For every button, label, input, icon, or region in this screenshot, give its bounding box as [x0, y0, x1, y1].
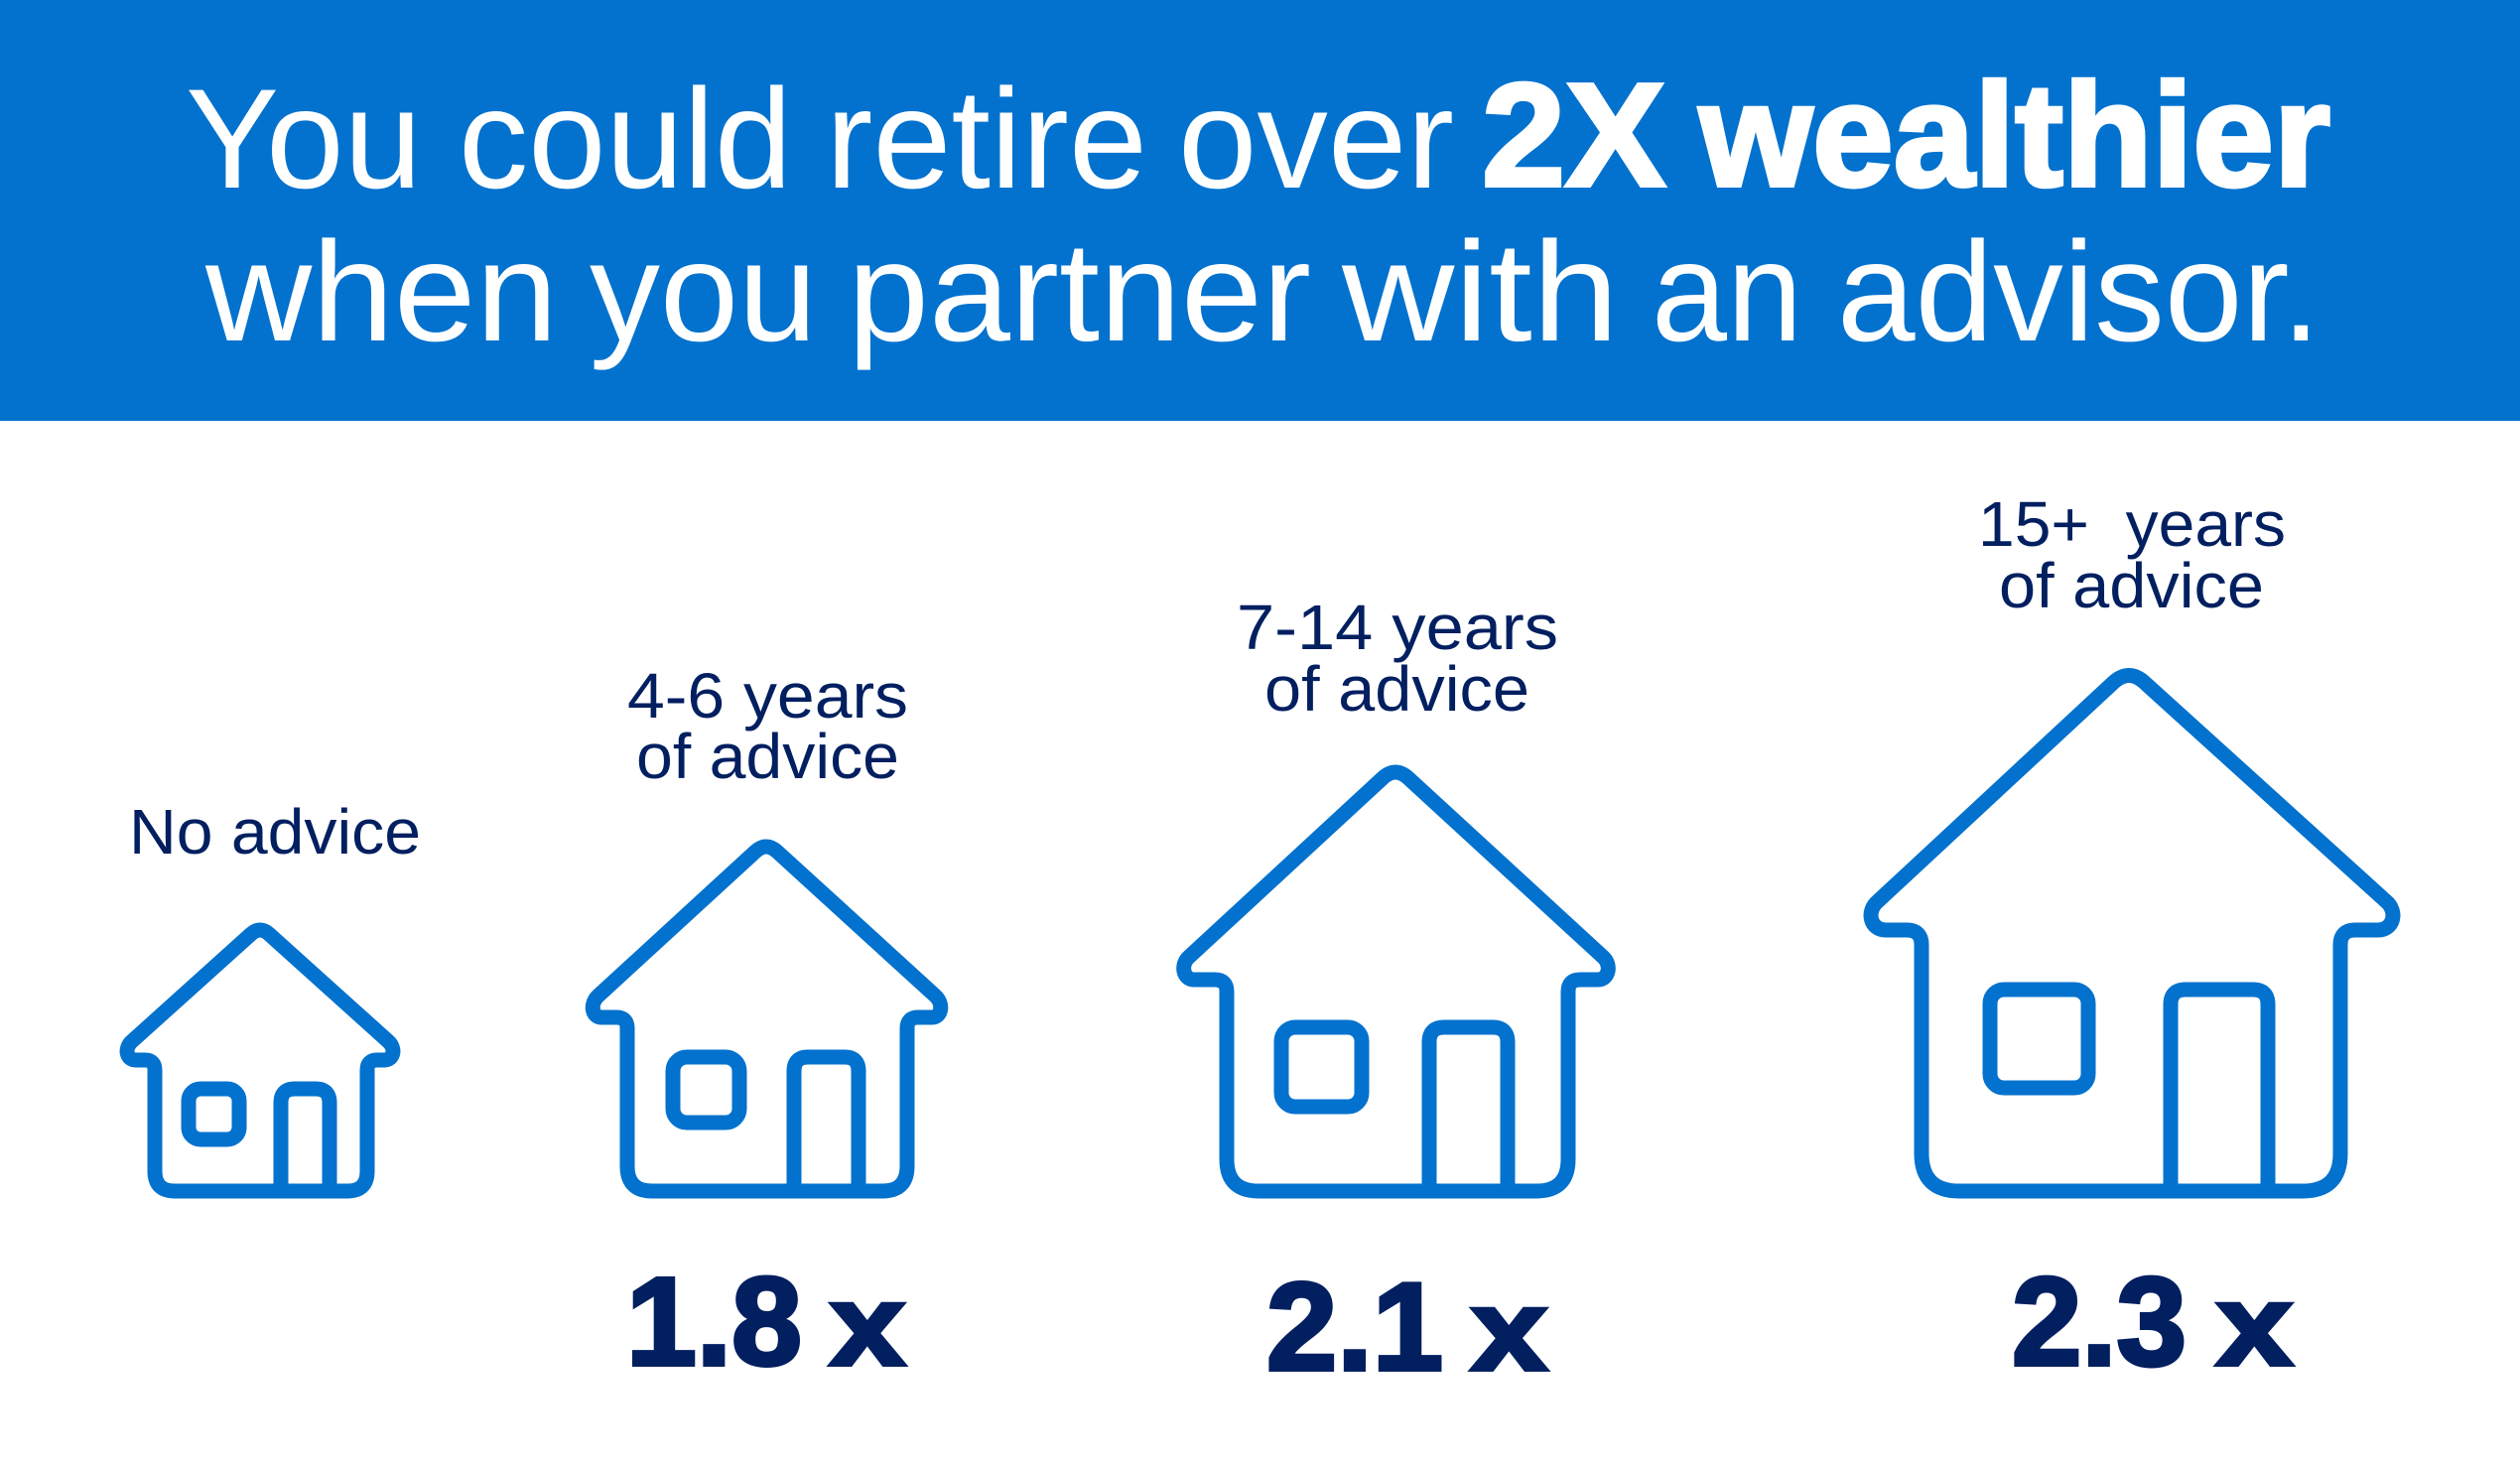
- value: 2.3x: x: [2216, 1261, 2293, 1390]
- value: 2.3x: 2.3: [2012, 1252, 2187, 1392]
- title: partner: [848, 213, 1311, 371]
- label: 7-14 years of advice: 7-14 years: [1237, 592, 1558, 663]
- title: with: [1341, 213, 1619, 371]
- title: retire: [826, 61, 1147, 218]
- label: 4-6 years of advice: 4-6 years: [627, 660, 908, 732]
- icon: house: [593, 847, 941, 1191]
- label: no advice: No advice: [129, 796, 421, 867]
- value: 2.1x: x: [1471, 1266, 1547, 1395]
- value: 1.8x: 1.8: [626, 1252, 802, 1392]
- title: You: [186, 61, 422, 218]
- icon: large house: [1871, 675, 2393, 1191]
- icon: house: [1184, 772, 1608, 1191]
- title: 2X: [1482, 54, 1665, 217]
- label: 4-6 years of advice: of advice: [636, 721, 899, 792]
- title: wealthier: [1698, 54, 2330, 217]
- value: 2.1x: [1266, 1257, 1547, 1397]
- title: an: [1652, 213, 1802, 371]
- label: 7-14 years of advice: of advice: [1264, 653, 1529, 725]
- title: advisor.: [1837, 213, 2321, 371]
- title: when: [204, 213, 558, 371]
- label: 4-6 years of advice: [627, 660, 908, 792]
- label: 15+ years of advice: of advice: [1999, 550, 2264, 621]
- column: 15+ years: [1871, 488, 2393, 1392]
- value: 1.8x: [626, 1252, 905, 1392]
- label: 7-14 years of advice: [1237, 592, 1558, 725]
- title: you: [590, 213, 817, 371]
- title: over: [1178, 61, 1454, 218]
- column: 7-14 years: [1184, 592, 1608, 1397]
- title: could: [459, 61, 792, 218]
- label: 15+ years of advice: [1978, 488, 2286, 621]
- value: 1.8x: x: [830, 1261, 905, 1390]
- column: no advice: [127, 796, 421, 1191]
- title: [186, 54, 2330, 371]
- label: 15+ years of advice: 15+ years: [1978, 488, 2286, 560]
- column: 4-6 years: [593, 660, 941, 1392]
- value: 2.1x: 2.1: [1266, 1257, 1443, 1397]
- icon: small house: [127, 930, 393, 1191]
- value: 2.3x: [2012, 1252, 2293, 1392]
- header banner: [0, 0, 2520, 421]
